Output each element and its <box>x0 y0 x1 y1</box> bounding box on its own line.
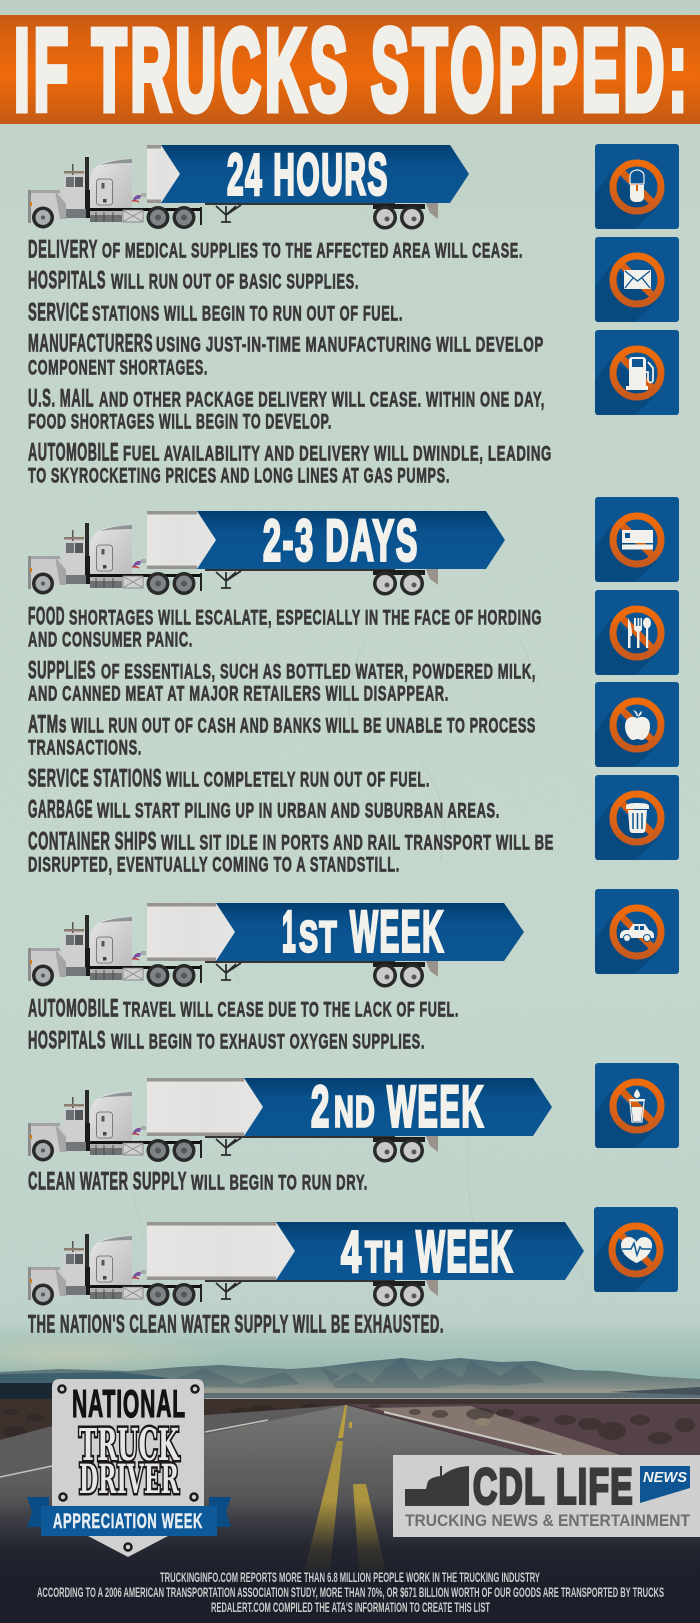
heading: WEEK <box>350 900 445 964</box>
heading: TH <box>365 1232 405 1282</box>
item: supplies: AND CANNED MEAT AT MAJOR RETAILERS WILL DISAPPEAR. <box>28 682 449 706</box>
item: automobile travel: TRAVEL WILL CEASE DUE TO THE LACK OF FUEL. <box>123 998 459 1022</box>
text block: 1st week <box>28 994 459 1054</box>
item: hospitals <box>28 266 359 294</box>
ribbon <box>216 903 524 961</box>
badge heading: NATIONAL <box>72 1383 186 1426</box>
section: 24 hours header <box>28 142 469 230</box>
item: u.s. mail: FOOD SHORTAGES WILL BEGIN TO DEVELOP. <box>28 410 332 434</box>
item: hospitals: WILL RUN OUT OF BASIC SUPPLIES. <box>111 270 359 294</box>
section: 1st week header <box>28 900 524 988</box>
icon: no food <box>595 590 679 675</box>
section: 4th week header <box>28 1220 584 1306</box>
item: automobile: AUTOMOBILE <box>28 438 119 466</box>
badge: national truck driver appreciation week <box>27 1379 231 1557</box>
item: food: FOOD <box>28 602 65 630</box>
item: hospitals oxygen: WILL BEGIN TO EXHAUST OXYGEN SUPPLIES. <box>111 1030 425 1054</box>
text block: 2nd week: WILL BEGIN TO RUN DRY. <box>191 1172 368 1194</box>
heading: ST <box>299 912 338 962</box>
item: supplies: SUPPLIES <box>28 656 96 684</box>
icon: no mail <box>595 237 679 322</box>
item: service stations: WILL COMPLETELY RUN OUT OF FUEL. <box>166 768 430 792</box>
truck <box>28 157 438 230</box>
heading <box>311 1074 485 1140</box>
heading: 4 <box>341 1220 363 1284</box>
icon: no garbage <box>595 775 679 860</box>
item: automobile travel: AUTOMOBILE <box>28 994 119 1022</box>
item: container ships <box>28 828 554 876</box>
item: service stations: SERVICE STATIONS <box>28 764 162 792</box>
item: hospitals oxygen: HOSPITALS <box>28 1026 106 1054</box>
item: automobile <box>28 438 552 488</box>
truck wordmark: TRUCK <box>79 1420 180 1471</box>
section: 2-3 days header <box>28 508 505 596</box>
heading: 24 HOURS <box>227 142 389 208</box>
news flag: NEWS <box>643 1469 687 1486</box>
item: automobile travel <box>28 994 459 1022</box>
item: u.s. mail: U.S. MAIL <box>28 384 94 412</box>
heading: WEEK <box>387 1074 485 1140</box>
item: supplies <box>28 656 536 706</box>
truck silhouette <box>405 1466 469 1506</box>
ribbon <box>197 511 505 569</box>
ribbon <box>276 1222 584 1280</box>
heading: ND <box>334 1088 376 1136</box>
item: service: STATIONS WILL BEGIN TO RUN OUT OF FUEL. <box>92 302 403 326</box>
item: garbage <box>28 796 500 824</box>
icon: no apple <box>595 682 679 767</box>
item: food <box>28 602 542 652</box>
item: hospitals: HOSPITALS <box>28 266 106 294</box>
truck <box>28 1090 438 1162</box>
truck <box>28 915 438 988</box>
item: service: SERVICE <box>28 298 89 326</box>
item: delivery: DELIVERY <box>28 236 98 264</box>
highway photo <box>0 1318 700 1623</box>
footer sources <box>37 1569 664 1615</box>
item: manufacturers: COMPONENT SHORTAGES. <box>28 356 208 380</box>
item: delivery <box>28 236 523 264</box>
item: container ships: CONTAINER SHIPS <box>28 828 157 856</box>
driver wordmark: DRIVER <box>79 1456 179 1503</box>
ribbon <box>244 1078 552 1136</box>
icon: no car <box>595 889 679 974</box>
heading: 2 <box>311 1074 331 1140</box>
truck <box>28 1234 438 1306</box>
item: atms <box>28 710 536 760</box>
item: hospitals oxygen <box>28 1026 425 1054</box>
item: container ships: DISRUPTED, EVENTUALLY COMING TO A STANDSTILL. <box>28 854 400 876</box>
news flag <box>640 1466 690 1503</box>
heading: 2-3 DAYS <box>263 508 419 574</box>
icon: no health <box>594 1207 678 1292</box>
heading <box>282 900 445 964</box>
ribbon: APPRECIATION WEEK <box>53 1510 203 1533</box>
item: manufacturers: MANUFACTURERS <box>28 330 153 358</box>
icon: no water <box>595 1063 679 1148</box>
ribbon <box>27 1497 231 1536</box>
item: food: AND CONSUMER PANIC. <box>28 628 193 652</box>
heading: WEEK <box>416 1220 514 1284</box>
item: atms: TRANSACTIONS. <box>28 736 142 760</box>
icon: no credit card <box>595 497 679 582</box>
text block: 24 hours <box>28 236 552 488</box>
item: atms: ATMs <box>28 710 67 738</box>
text block: 2nd week: CLEAN WATER SUPPLY <box>28 1168 187 1196</box>
title banner <box>0 5 700 135</box>
text block: 2-3 days <box>28 602 554 876</box>
logo: cdl life news <box>393 1455 700 1537</box>
heading: 1 <box>282 900 297 964</box>
truck <box>28 523 438 596</box>
item: manufacturers <box>28 330 544 380</box>
item: service <box>28 298 403 326</box>
icon: no fuel <box>595 330 679 415</box>
ribbon <box>161 145 469 203</box>
section: 2nd week header <box>28 1074 552 1162</box>
item: service stations <box>28 764 430 792</box>
item: u.s. mail <box>28 384 545 434</box>
heading <box>341 1220 514 1284</box>
item: automobile: TO SKYROCKETING PRICES AND LONG LINES AT GAS PUMPS. <box>28 464 450 488</box>
item: garbage: GARBAGE <box>28 796 93 824</box>
icon: no medicine <box>595 144 679 229</box>
